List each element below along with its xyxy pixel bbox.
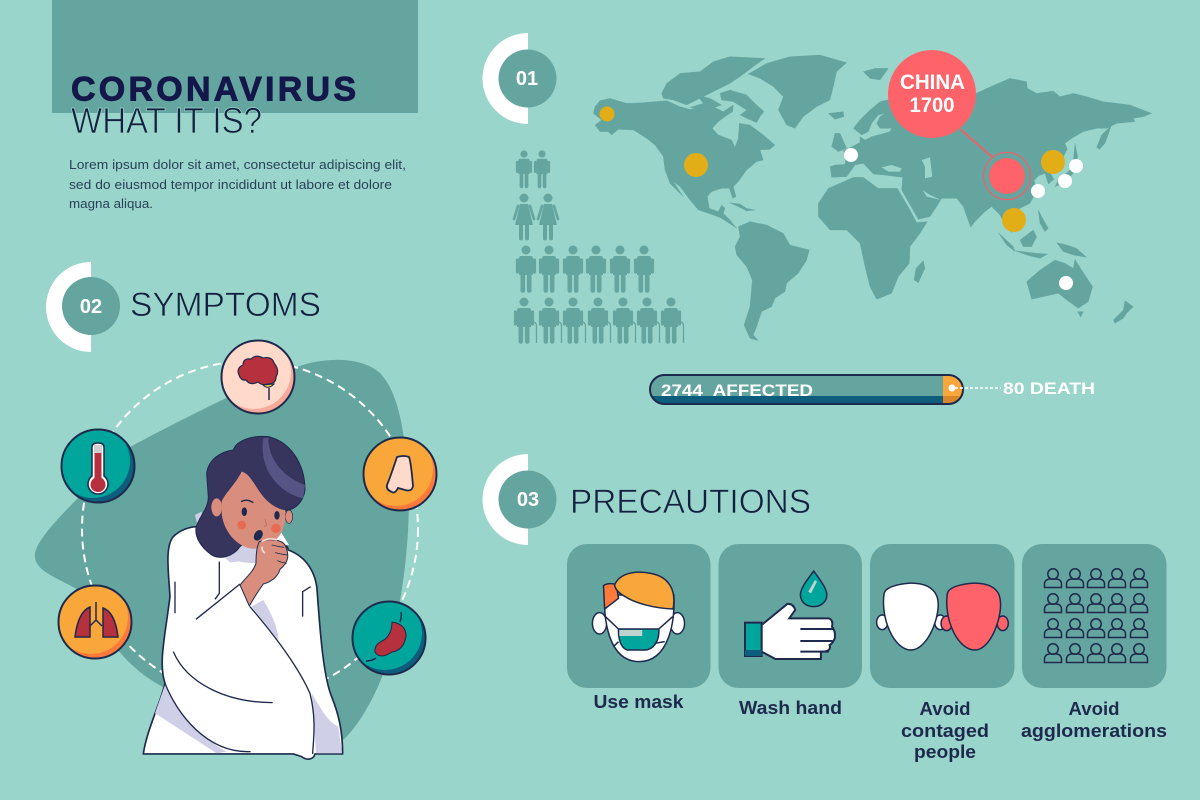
icon: lungs: [54, 580, 132, 658]
icon: crowd: [1044, 569, 1148, 662]
shawl group: [143, 527, 343, 759]
eurasia: [830, 78, 1152, 233]
sumatra: [998, 233, 1015, 252]
icon: brain: [217, 335, 294, 414]
new guinea: [1057, 243, 1087, 257]
affected progress bar: [650, 375, 963, 404]
java: [1015, 251, 1048, 258]
affected progress bar: 2744 AFFECTED: [661, 381, 813, 400]
right collar: [267, 532, 289, 547]
china marker: [984, 152, 1030, 200]
head group: [195, 436, 305, 606]
intro text block: [69, 157, 406, 211]
cheeks: [237, 521, 281, 533]
new zealand: [1113, 301, 1133, 323]
precaution labels: people: [914, 742, 976, 762]
china label: 1700: [910, 94, 954, 117]
svalbard: [863, 68, 888, 80]
precaution labels: contaged: [901, 721, 989, 741]
precaution labels: agglomerations: [1021, 721, 1167, 741]
hair highlight: [263, 437, 305, 498]
badge 01: 01: [516, 68, 538, 90]
intro text block: sed do eiusmod tempor incididunt ut labore et dolore: [69, 177, 392, 192]
title: [71, 70, 356, 141]
china callout bubble: [888, 50, 976, 138]
panel: use mask: [567, 544, 710, 688]
panel: avoid contaged people: [870, 544, 1014, 688]
symptoms blob: [35, 360, 409, 740]
shawl shading: [155, 550, 342, 753]
icon: nose: [359, 432, 436, 510]
greenland: [748, 55, 847, 128]
white markers: [844, 148, 1083, 290]
kamchatka: [1097, 125, 1112, 149]
nose: [264, 519, 267, 527]
icon: two faces: [877, 583, 1008, 650]
shawl fold lines: [165, 562, 314, 754]
australia: [1027, 259, 1093, 308]
china callout line: [960, 129, 992, 157]
madagascar: [914, 261, 925, 283]
world map: [593, 55, 1152, 341]
people pictogram: [514, 150, 684, 343]
britain: [832, 133, 847, 152]
precaution labels: [594, 692, 1167, 762]
death callout: [948, 379, 1095, 398]
intro text block: Lorem ipsum dolor sit amet, consectetur adipiscing elit,: [69, 157, 406, 172]
china label: [900, 71, 965, 117]
finger lines: [272, 545, 287, 563]
caribbean: [729, 203, 755, 211]
ear left: [211, 498, 222, 516]
shawl: [143, 527, 343, 759]
badge 03: 03: [517, 489, 539, 511]
gold markers: [600, 106, 1065, 232]
dashed ring: [82, 361, 418, 697]
icon: masked face: [592, 572, 685, 662]
panel: wash hand: [718, 544, 862, 688]
badge 01: [482, 33, 556, 124]
borneo: [1020, 230, 1037, 247]
inland seas: [882, 157, 941, 200]
cough breath: [262, 539, 277, 553]
eyebrow: [241, 500, 253, 503]
precaution labels: Avoid: [920, 699, 970, 719]
badge 03: [482, 454, 556, 545]
icon: thermometer: [56, 424, 134, 502]
eyes: [242, 507, 280, 520]
hair: [196, 436, 305, 557]
precaution labels: Use mask: [594, 692, 685, 712]
south america: [735, 222, 809, 341]
badge 02: [46, 262, 120, 352]
heading: precautions: PRECAUTIONS: [570, 483, 811, 521]
cough hand: [240, 540, 288, 606]
front collar: [218, 543, 260, 563]
philippines: [1038, 210, 1048, 232]
mouth: [252, 528, 265, 542]
title band: [52, 0, 418, 113]
iceland: [828, 112, 844, 119]
icon: hand and water drop: [745, 571, 835, 659]
ear right: [285, 510, 293, 523]
title: WHAT IT IS?: [71, 100, 262, 141]
badge 02: 02: [80, 296, 102, 318]
north america: [593, 98, 775, 228]
heading: symptoms: SYMPTOMS: [130, 286, 321, 324]
tasmania: [1078, 312, 1083, 317]
africa: [818, 177, 927, 299]
left collar: [195, 512, 203, 530]
americas and greenland: [593, 55, 847, 341]
arctic islands: [662, 57, 765, 123]
precaution labels: Avoid: [1068, 699, 1120, 719]
death callout: 80 DEATH: [1003, 379, 1095, 398]
china label: CHINA: [900, 71, 965, 94]
precaution labels: Wash hand: [739, 698, 842, 718]
eastern hemisphere: [818, 68, 1152, 323]
face: [222, 472, 285, 549]
intro text block: magna aliqua.: [69, 196, 153, 211]
title: CORONAVIRUS: [71, 70, 356, 108]
person coughing: [143, 436, 343, 759]
japan: [1055, 143, 1078, 187]
panel: avoid agglomerations: [1022, 544, 1166, 688]
icon: stomach: [348, 596, 426, 674]
